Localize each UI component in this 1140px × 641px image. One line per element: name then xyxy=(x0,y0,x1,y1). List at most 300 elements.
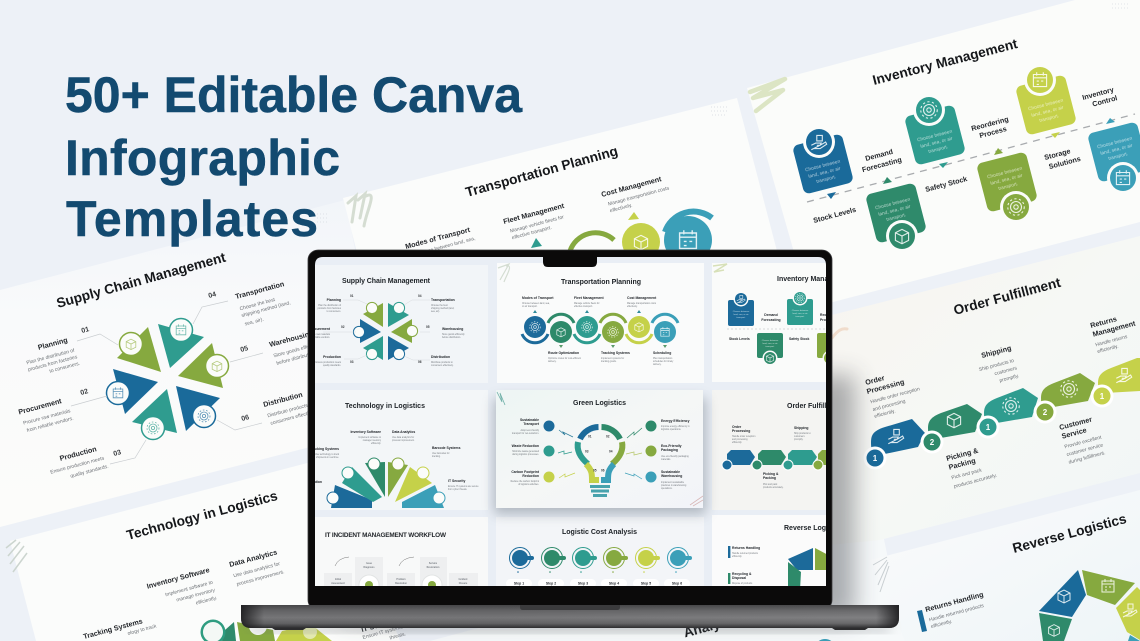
card: inventory lime: Choose between xyxy=(1028,98,1064,112)
screen labels: Fleet Management xyxy=(574,296,604,300)
label: production: quality standards. xyxy=(70,464,109,480)
card: stock levels blue: transport. xyxy=(816,174,837,185)
screen labels: tracking. xyxy=(432,455,441,458)
bulb base xyxy=(590,485,610,497)
card: inventory lime: land, sea, or air xyxy=(1031,105,1065,119)
screen workflow labels: Assessment xyxy=(331,582,345,585)
screen icons xyxy=(530,322,669,337)
card: inventory lime xyxy=(1015,64,1077,138)
label: order processing: efficiently. xyxy=(874,408,896,420)
title: Infographic xyxy=(65,130,340,186)
slide: technology in logistics xyxy=(6,457,412,641)
heading: transportation planning: Transportation Planning xyxy=(464,143,619,200)
screen labels right: Distribution xyxy=(431,355,450,359)
label: returns management: efficiently. xyxy=(1097,344,1119,355)
number 1 blue xyxy=(864,446,886,470)
number 1 teal: 1 xyxy=(986,423,991,432)
label: warehousing: before distribution. xyxy=(276,350,317,367)
screen labels: Ensure IT systems are secure xyxy=(448,485,479,488)
label: planning: products from factories xyxy=(27,354,78,373)
scribble: technology xyxy=(6,540,27,572)
screen heading: Order Fulfillment xyxy=(787,403,844,410)
screen circles chain xyxy=(522,314,678,343)
screen workflow labels: Problem xyxy=(396,579,406,581)
arc: scheduling xyxy=(665,212,712,232)
screen card text: transport. xyxy=(736,316,746,319)
label: order processing: and processing xyxy=(872,398,906,413)
screen labels left xyxy=(315,298,341,366)
label: planning xyxy=(22,334,81,380)
bulb xyxy=(578,427,622,480)
right labels: Improve energy efficiency in xyxy=(661,425,690,428)
screen labels left: Procurement xyxy=(309,327,331,331)
screen labels: Packing xyxy=(763,476,776,480)
right labels xyxy=(661,419,690,490)
number 2 olive xyxy=(1034,400,1056,424)
screen labels: Handle order reception xyxy=(732,435,756,438)
heading: order fulfillment: Order Fulfillment xyxy=(952,275,1063,318)
screen workflow labels: Issue xyxy=(366,563,373,565)
screen step labels: Step 6 xyxy=(672,582,682,586)
label: returns handling xyxy=(924,590,989,630)
screen labels: effective transport. xyxy=(574,305,593,308)
screen labels xyxy=(732,425,811,489)
left labels: Reduce the carbon footprint xyxy=(511,480,539,483)
label: transportation xyxy=(234,279,294,328)
step: returns xyxy=(1098,358,1140,393)
dot pattern: transportation xyxy=(711,107,727,115)
step 06: 06 xyxy=(241,414,250,423)
screen card text: land, sea, or air xyxy=(733,313,749,316)
screen labels right: Warehousing xyxy=(442,327,463,331)
right labels: logistics operations. xyxy=(661,428,682,431)
screen labels: Plan transportation xyxy=(653,357,673,360)
label: warehousing xyxy=(268,327,324,367)
label: safety stock: Safety Stock xyxy=(924,174,968,194)
scribble: inventory xyxy=(750,79,785,111)
left labels: Waste Reduction xyxy=(512,444,539,448)
left labels: Transport xyxy=(523,422,540,426)
label: shipping: Shipping xyxy=(980,343,1012,360)
screen heading: Supply Chain Management xyxy=(342,278,431,285)
screen labels: efficiently. xyxy=(732,441,742,444)
camera notch xyxy=(543,257,597,267)
label: shipping xyxy=(974,343,1020,389)
screen step labels: Step 2 xyxy=(546,582,556,586)
screen dots xyxy=(517,571,677,573)
screen heading: Transportation Planning xyxy=(561,279,641,286)
screen labels: customers xyxy=(794,435,805,438)
label: procurement xyxy=(17,394,74,435)
label: inventory control xyxy=(1081,85,1118,111)
marker bar xyxy=(917,610,927,632)
label: picking and packing: Picking & xyxy=(945,446,979,463)
label: returns management xyxy=(1089,310,1140,355)
label: returns handling: Handle returned products xyxy=(929,603,985,623)
screen labels: Inventory Software xyxy=(350,430,381,434)
screen labels: Returns Handling xyxy=(732,546,760,550)
label: shipping: Ship products to xyxy=(978,358,1015,373)
screen workflow labels: Service xyxy=(429,563,438,565)
label: fleet management: effective transport. xyxy=(511,225,552,241)
left icons xyxy=(544,420,554,482)
label: modes of transport: Choose between land, sea, xyxy=(416,236,476,257)
screen labels: Choose between land, sea, xyxy=(522,302,550,305)
dot pattern: inventory xyxy=(1112,4,1128,8)
screen labels: efficiently. xyxy=(371,442,381,445)
screen labels: Pick and pack xyxy=(763,484,778,486)
label: storage solutions: Storage xyxy=(1043,146,1071,162)
label: returns management: Handle returns xyxy=(1095,334,1129,348)
screen labels: Recycling & xyxy=(732,572,752,576)
screen card text: land, sea, or air xyxy=(792,312,808,315)
screen slide: transportation xyxy=(497,263,704,383)
screen scribble xyxy=(498,264,509,282)
label: picking and packing xyxy=(945,443,998,490)
right icons xyxy=(646,420,656,482)
label: customer service xyxy=(1058,413,1107,466)
circle: lime xyxy=(622,223,660,261)
screen xyxy=(303,257,854,595)
number 2 green: 2 xyxy=(930,438,935,447)
label: cost management: Manage transportation costs xyxy=(607,185,670,208)
label: it security partial: IT Security xyxy=(360,616,398,634)
screen labels: Manage vehicle fleets for xyxy=(574,302,600,305)
right labels: Warehousing xyxy=(661,474,682,478)
screen labels: Barcode Systems xyxy=(432,446,461,450)
screen workflow labels xyxy=(331,563,468,585)
label: production: Ensure production meets xyxy=(50,455,105,476)
laptop feet xyxy=(272,628,868,630)
card: reordering olive: land, sea, or air xyxy=(990,173,1024,187)
icon: checklist xyxy=(634,235,648,250)
label: returns management: Returns xyxy=(1089,314,1118,330)
marker: cost xyxy=(628,212,639,220)
connectors xyxy=(71,301,263,464)
squiggle arrows xyxy=(558,428,642,479)
screen slide: IT incident xyxy=(315,517,488,586)
marker: fleet xyxy=(531,238,542,248)
bulb numbers: 03 xyxy=(585,450,589,454)
screen cards xyxy=(728,292,826,364)
divider dashed line xyxy=(807,114,1135,202)
screen labels right: Choose the best xyxy=(431,304,448,307)
label: picking and packing: Pick and pack xyxy=(951,467,983,481)
screen labels: delivery. xyxy=(653,363,662,366)
label: reordering process: Reordering xyxy=(970,114,1010,133)
screen labels: Manage transportation costs xyxy=(627,302,657,305)
label: returns handling: Returns Handling xyxy=(924,590,984,614)
label: modes of transport xyxy=(404,224,476,260)
card: stock levels blue xyxy=(792,126,854,199)
screen card text: Choose between xyxy=(762,339,779,342)
screen card text: transport. xyxy=(765,345,775,348)
screen workflow labels: Initial xyxy=(335,578,341,581)
label: procurement: Procure raw materials xyxy=(23,408,72,427)
screen labels: process improvement. xyxy=(392,439,415,442)
step 01: 01 xyxy=(81,326,90,335)
label: planning: Plan the distribution of xyxy=(26,348,76,366)
number 1 lime xyxy=(1090,384,1114,408)
card: stock levels blue: land, sea, or air xyxy=(808,166,842,180)
card: demand forecasting teal: land, sea, or air xyxy=(920,136,954,150)
circle: partial cyan xyxy=(819,639,831,641)
label: demand forecasting xyxy=(858,145,903,174)
label: fleet management xyxy=(502,201,570,242)
card: storage cyan: land, sea, or air xyxy=(1100,143,1134,157)
left labels: Adopt eco-friendly xyxy=(520,429,540,432)
right labels: operations. xyxy=(661,487,673,490)
screen bars xyxy=(728,546,730,558)
label: distribution xyxy=(262,387,319,427)
screen labels left: Planning xyxy=(327,298,341,302)
screen card text: transport. xyxy=(795,315,805,318)
screen triangles xyxy=(353,302,418,360)
hexagon of triangles xyxy=(106,318,228,440)
screen slide shadow: green logistics xyxy=(494,398,706,514)
label: cost management: effectively. xyxy=(609,203,633,214)
bulb numbers: 04 xyxy=(609,450,613,454)
label: transportation: Transportation xyxy=(234,279,285,301)
label: customer service: Customer xyxy=(1058,415,1093,432)
title xyxy=(65,67,523,247)
slide: order fulfillment xyxy=(820,236,1140,545)
step: picking xyxy=(928,404,982,439)
screen labels: Demand xyxy=(764,313,778,317)
screen slide: reverse logistics xyxy=(712,515,844,590)
screen labels: Processing xyxy=(732,429,750,433)
screen wheel xyxy=(788,548,830,590)
label: distribution: Distribute products to xyxy=(267,401,314,419)
screen labels: Implement software to xyxy=(358,436,382,439)
laptop lid and bezel xyxy=(308,250,832,610)
screen numbers: 04 xyxy=(418,294,422,298)
bulb numbers: 01 xyxy=(588,434,592,438)
screen step labels: Step 5 xyxy=(641,582,651,586)
number 1 lime: 1 xyxy=(1100,392,1105,401)
label: tracking systems: Tracking Systems xyxy=(82,616,144,641)
heading: inventory management: Inventory Management xyxy=(871,36,1020,88)
card: safety stock dark green: land, sea, or air xyxy=(878,204,912,218)
bulb numbers: 06 xyxy=(601,468,605,472)
left labels: transport for net-reduction. xyxy=(512,432,539,435)
label: modes of transport: Modes of Transport xyxy=(404,225,472,251)
screen labels xyxy=(303,430,479,491)
label: fleet management: Fleet Management xyxy=(502,201,566,226)
screen numbers: 03 xyxy=(350,360,354,364)
label: cost management: Cost Management xyxy=(600,174,663,199)
screen labels right: Distribute products to xyxy=(431,361,453,364)
icon: calendar xyxy=(680,230,696,248)
screen step labels: Step 3 xyxy=(578,582,588,586)
label: inventory software: efficiently. xyxy=(195,595,218,607)
screen labels: effectively. xyxy=(627,305,638,308)
step: order processing xyxy=(871,419,925,455)
text: tracking description: ology to track xyxy=(127,623,158,637)
heading: reverse logistics: Reverse Logistics xyxy=(1011,511,1128,556)
label: customer service: customer service xyxy=(1066,442,1104,458)
circle: cyan xyxy=(664,216,712,264)
screen labels right: Store goods efficiently xyxy=(442,333,465,336)
screen labels: Cost Management xyxy=(627,296,657,300)
screen labels: efficiently. xyxy=(732,555,742,558)
hinge notch xyxy=(520,605,620,610)
title: 50+ Editable Canva xyxy=(65,67,523,123)
screen labels right: before distribution. xyxy=(442,336,461,339)
screen slide: logistic cost analysis xyxy=(496,517,704,588)
label: order processing: Order xyxy=(864,373,886,387)
right labels: Use eco-friendly packaging xyxy=(661,455,689,458)
screen labels: Tracking Systems xyxy=(601,351,630,355)
label: inventory control: Control xyxy=(1091,93,1118,109)
number 2 olive: 2 xyxy=(1043,408,1048,417)
left labels: Sustainable xyxy=(520,418,539,422)
screen step rings xyxy=(510,548,692,568)
label: returns management: Management xyxy=(1092,318,1137,339)
screen numbers xyxy=(341,294,430,364)
screen numbers: 05 xyxy=(426,325,430,329)
screen card text: Choose between xyxy=(733,310,750,313)
screen labels: Route Optimization xyxy=(548,351,579,355)
number 1 blue: 1 xyxy=(873,454,878,463)
right labels: Packaging xyxy=(661,448,678,452)
left labels: during logistics processes. xyxy=(512,453,539,456)
label: procurement: Procurement xyxy=(17,396,63,416)
screen workflow labels: Incident xyxy=(459,578,468,581)
slide: inventory management xyxy=(747,0,1140,308)
screen labels: Use barcodes for xyxy=(432,452,450,455)
screen labels: Process xyxy=(820,318,833,322)
slide: transportation planning xyxy=(343,98,795,420)
step: customer service xyxy=(1041,373,1095,408)
screen labels: Shipping xyxy=(794,426,809,430)
fan segments partial xyxy=(201,617,332,641)
screen labels: promptly. xyxy=(794,438,804,441)
screen labels: Use data analytics for xyxy=(392,436,414,439)
card: inventory lime: transport. xyxy=(1039,113,1060,124)
label: data analytics xyxy=(228,547,285,588)
label: picking and packing: Packing xyxy=(948,456,976,472)
screen labels: schedules for timely xyxy=(653,360,674,363)
screen step labels xyxy=(514,582,682,586)
screen workflow labels: Restoration xyxy=(427,566,440,569)
label: inventory software: Inventory Software xyxy=(146,565,211,591)
card: safety stock dark green: transport. xyxy=(886,212,907,223)
label: customer service: Service xyxy=(1061,425,1088,441)
card: storage cyan: transport. xyxy=(1108,151,1129,162)
label: inventory control: Inventory xyxy=(1081,85,1115,102)
screen labels right: Transportation xyxy=(431,298,455,302)
title: Templates xyxy=(66,191,318,247)
label: storage solutions: Solutions xyxy=(1048,154,1082,171)
screen slide: supply chain xyxy=(308,265,488,383)
screen heading: Green Logistics xyxy=(573,400,626,407)
label: customer service: during fulfillment. xyxy=(1068,450,1106,466)
right labels: materials. xyxy=(661,458,671,461)
screen connectors xyxy=(323,300,430,360)
label: reordering process: Process xyxy=(978,124,1008,140)
screen labels: Implement systems for xyxy=(601,357,624,360)
number 1 teal xyxy=(976,416,1000,438)
label: inventory software: Implement software to xyxy=(165,580,214,598)
laptop base shadow xyxy=(250,624,890,632)
card: stock levels blue: Choose between xyxy=(805,159,841,173)
screen labels: and processing xyxy=(732,438,748,441)
screen labels: Picking & xyxy=(763,472,779,476)
label: stock levels: Stock Levels xyxy=(812,205,857,225)
step icons xyxy=(888,368,1132,444)
text: it security line 1: Ensure IT systems are xyxy=(362,622,412,641)
screen step labels: Step 1 xyxy=(514,582,524,586)
screen heading: Reverse Logistics xyxy=(784,525,844,532)
screen labels xyxy=(729,314,826,341)
screen slide: order fulfillment xyxy=(712,390,826,510)
label: data analytics: Data Analytics xyxy=(228,547,278,569)
screen labels: Scheduling xyxy=(653,351,671,355)
screen labels: Automation xyxy=(303,480,322,484)
screen workflow labels: Diagnosis xyxy=(364,567,375,569)
screen labels left: from reliable vendors. xyxy=(308,336,330,339)
screen bar 2 xyxy=(728,573,730,584)
laptop shadow xyxy=(340,375,855,620)
left labels: of logistics activities. xyxy=(518,483,539,486)
card: demand forecasting teal: Choose between xyxy=(917,129,953,143)
label: distribution: consumers effectively. xyxy=(270,408,319,427)
label: shipping: customers xyxy=(994,365,1018,377)
slide: supply chain management xyxy=(0,200,400,527)
label: planning: to consumers. xyxy=(49,361,81,375)
heading: logistic cost analysis: Analysis xyxy=(682,611,741,640)
screen labels left: Plan the distribution of xyxy=(318,304,341,307)
screen labels left: to consumers. xyxy=(327,310,341,313)
label: warehousing: Store goods efficiently xyxy=(273,341,322,359)
card: demand forecasting teal xyxy=(904,94,966,168)
screen labels left: Production xyxy=(323,355,341,359)
label: transportation: shipping method (land, xyxy=(241,300,291,319)
screen workflow labels: Closure xyxy=(459,583,468,585)
screen labels: Handle returned products xyxy=(732,552,759,555)
scribble: order xyxy=(832,329,847,338)
label: demand forecasting: Demand xyxy=(864,147,894,163)
label: planning: Planning xyxy=(37,335,69,352)
screen labels xyxy=(522,296,674,366)
wheel segments xyxy=(1039,570,1140,641)
screen labels: Dispose of products xyxy=(732,582,753,585)
screen labels right xyxy=(431,298,465,367)
screen labels: or air transport. xyxy=(522,305,538,308)
step: shipping xyxy=(984,388,1038,424)
left labels: Reduction xyxy=(522,474,539,478)
screen scribble xyxy=(497,392,505,405)
screen labels: Optimize routes for cost-efficient xyxy=(548,357,581,360)
screen labels: from cyber threats. xyxy=(448,488,468,491)
card: reordering olive: transport. xyxy=(998,181,1019,192)
label: cost management xyxy=(600,173,672,215)
label: data analytics: Use data analytics for xyxy=(233,561,281,579)
screen labels: Safety Stock xyxy=(789,337,809,341)
card: safety stock dark green: Choose between xyxy=(875,197,911,211)
screen labels left: Procure raw materials xyxy=(308,333,331,336)
screen slide: technology xyxy=(303,390,488,510)
screen card text: Choose between xyxy=(792,309,809,312)
screen labels: manage inventory xyxy=(363,439,382,442)
screen labels: delivery. xyxy=(548,360,557,363)
step 02: 02 xyxy=(80,388,89,397)
right labels: Implement sustainable xyxy=(661,481,685,484)
label: transportation: Choose the best xyxy=(239,297,276,312)
screen heading: Technology in Logistics xyxy=(345,403,425,410)
screen labels: tracking goods. xyxy=(601,360,617,363)
